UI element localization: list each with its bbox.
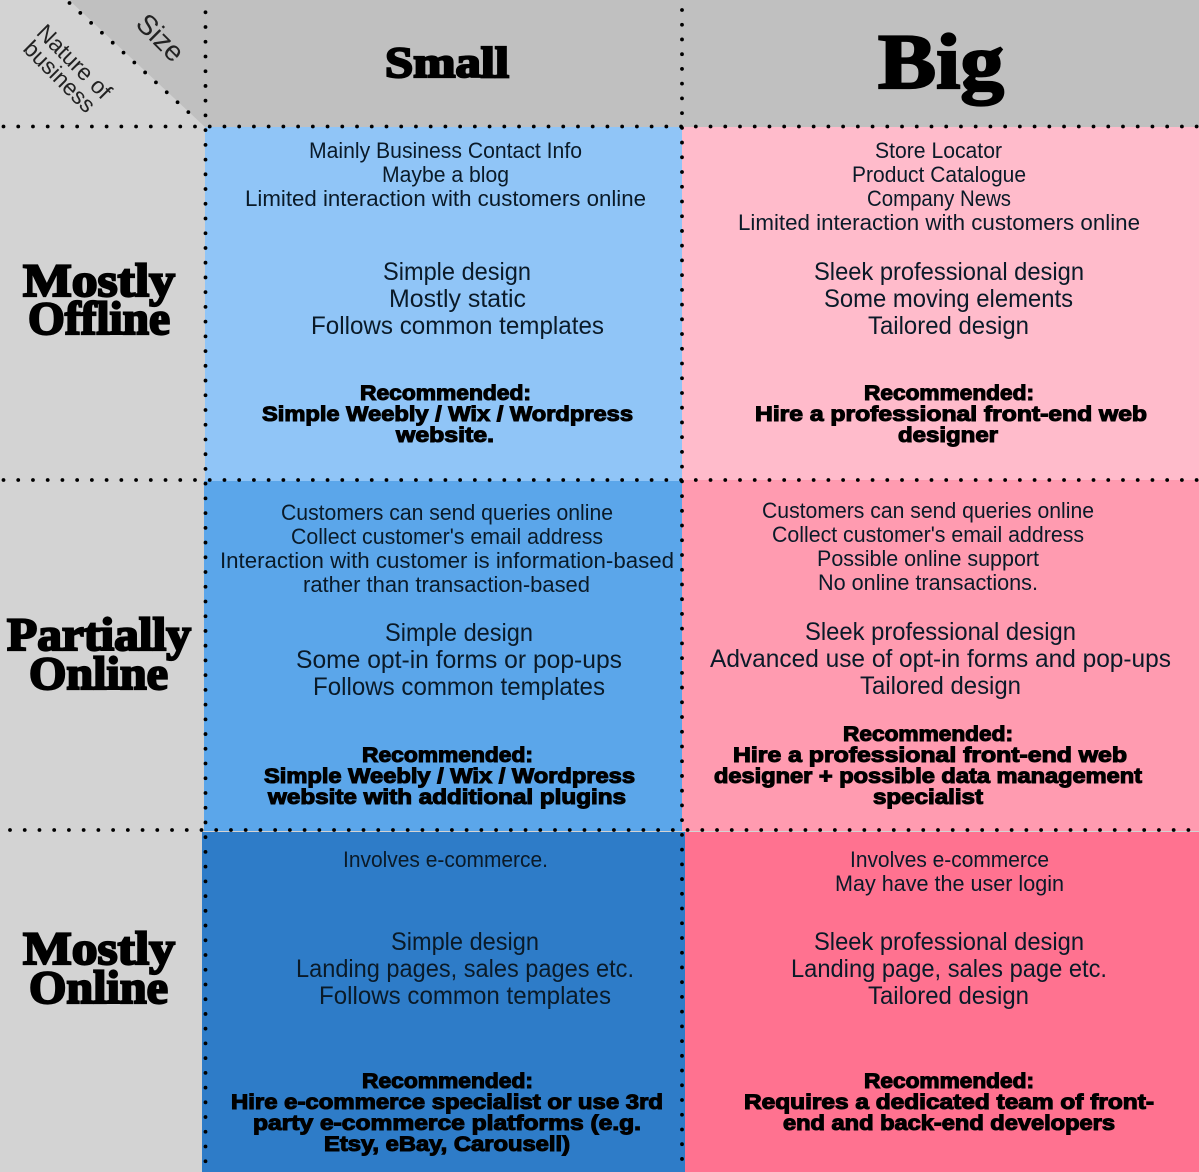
heading: Small: Small — [385, 40, 509, 87]
panel: big, mostly offline: Some moving elements — [824, 285, 1073, 313]
panel: small, mostly online: Simple design — [391, 928, 539, 956]
panel: big, mostly online: end and back-end developers — [783, 1112, 1115, 1135]
axis label: Nature of business: business — [18, 35, 101, 118]
panel: small, mostly offline: Simple design — [383, 258, 531, 286]
panel: big, partially online: specialist — [873, 786, 983, 809]
panel: big, mostly online — [685, 832, 1199, 1172]
panel: big, mostly offline: Hire a professional front-end web — [755, 403, 1147, 426]
panel: big, partially online: designer + possible data management — [714, 765, 1142, 788]
panel: big, mostly online: Landing page, sales page etc. — [791, 955, 1107, 983]
heading: Mostly Offline: Mostly — [23, 255, 176, 307]
heading: Partially Online: Online — [29, 648, 168, 700]
heading: Partially Online — [7, 609, 192, 700]
panel: small, mostly offline — [205, 127, 682, 481]
panel: small, mostly online: Involves e-commerce. — [343, 847, 548, 872]
panel: small, mostly offline: Mainly Business Contact Info — [309, 138, 582, 163]
panel: small, partially online: Recommended: — [362, 744, 533, 767]
panel: small, partially online: rather than transaction-based — [303, 572, 590, 597]
heading: Mostly Offline: Offline — [28, 293, 170, 345]
panel: big, mostly online: Tailored design — [868, 982, 1029, 1010]
panel: big, mostly online: Recommended: — [864, 1070, 1034, 1093]
panel: big, mostly online: May have the user login — [835, 871, 1064, 896]
panel: big, mostly offline: Sleek professional design — [814, 258, 1084, 286]
panel: small, mostly offline: Maybe a blog — [382, 162, 509, 187]
heading: Mostly Offline — [23, 255, 176, 345]
panel: small, partially online: Collect customer's email address — [291, 524, 603, 549]
panel: big, mostly online: Involves e-commerce — [850, 847, 1049, 872]
heading: Mostly Online — [23, 923, 176, 1014]
panel: big, mostly offline: Limited interaction with customers online — [738, 210, 1140, 235]
panel: small, mostly online: Landing pages, sales pages etc. — [296, 955, 634, 983]
panel: big, mostly offline: designer — [898, 424, 998, 447]
panel: small, mostly offline: Follows common templates — [311, 312, 604, 340]
panel: small, mostly offline: Mostly static — [389, 285, 526, 313]
panel: small, mostly offline: Recommended: — [360, 382, 531, 405]
axis label: Size: Size — [130, 7, 191, 68]
panel: small, partially online: Some opt-in forms or pop-ups — [296, 646, 622, 674]
panel: small, mostly offline: Simple Weebly / Wix / Wordpress — [262, 403, 633, 426]
panel: small, mostly online: Etsy, eBay, Carousell) — [324, 1133, 570, 1156]
panel: small, mostly online — [202, 832, 685, 1172]
panel: big, mostly offline: Product Catalogue — [852, 162, 1026, 187]
panel: small, partially online: Simple Weebly / Wix / Wordpress — [264, 765, 635, 788]
panel: big, partially online: Recommended: — [843, 723, 1013, 746]
header band: size — [69, 0, 1199, 127]
panel: small, partially online: Follows common templates — [313, 673, 605, 701]
heading: Mostly Online: Online — [29, 962, 168, 1014]
panel: big, mostly offline: Store Locator — [875, 138, 1002, 163]
panel: small, partially online: Customers can send queries online — [281, 500, 613, 525]
panel: small, partially online: Simple design — [385, 619, 533, 647]
panel: small, mostly offline: Limited interaction with customers online — [245, 186, 646, 211]
panel: small, partially online: Interaction with customer is information-based — [220, 548, 674, 573]
panel: small, mostly offline: website. — [395, 424, 494, 447]
heading: Big: Big — [878, 18, 1004, 105]
panel: big, partially online: Advanced use of opt-in forms and pop-ups — [710, 645, 1171, 673]
panel: small, mostly online: Follows common templates — [319, 982, 611, 1010]
panel: big, partially online: Hire a professional front-end web — [733, 744, 1127, 767]
panel: small, partially online — [204, 481, 682, 831]
panel: big, partially online: Possible online support — [817, 546, 1039, 571]
panel: big, partially online: Collect customer's email address — [772, 522, 1084, 547]
panel: small, partially online: website with additional plugins — [267, 786, 626, 809]
panel: big, mostly online: Requires a dedicated team of front- — [744, 1091, 1154, 1114]
panel: big, partially online: Sleek professional design — [805, 618, 1076, 646]
panel: small, mostly online: Hire e-commerce specialist or use 3rd — [231, 1091, 663, 1114]
panel: big, partially online: No online transactions. — [818, 570, 1038, 595]
heading: Partially Online: Partially — [7, 609, 192, 661]
panel: big, partially online: Customers can send queries online — [762, 498, 1094, 523]
panel: big, mostly online: Sleek professional design — [814, 928, 1084, 956]
heading: Mostly Online: Mostly — [23, 923, 176, 975]
panel: big, partially online: Tailored design — [860, 672, 1021, 700]
panel: big, partially online — [682, 480, 1199, 831]
panel: big, mostly offline: Tailored design — [868, 312, 1029, 340]
panel: small, mostly online: party e-commerce platforms (e.g. — [253, 1112, 641, 1135]
panel: big, mostly offline — [682, 127, 1199, 481]
panel: big, mostly offline: Recommended: — [864, 382, 1034, 405]
axis label: Nature of business: Nature of — [32, 19, 118, 105]
panel: big, mostly offline: Company News — [867, 186, 1011, 211]
panel: small, mostly online: Recommended: — [362, 1070, 533, 1093]
